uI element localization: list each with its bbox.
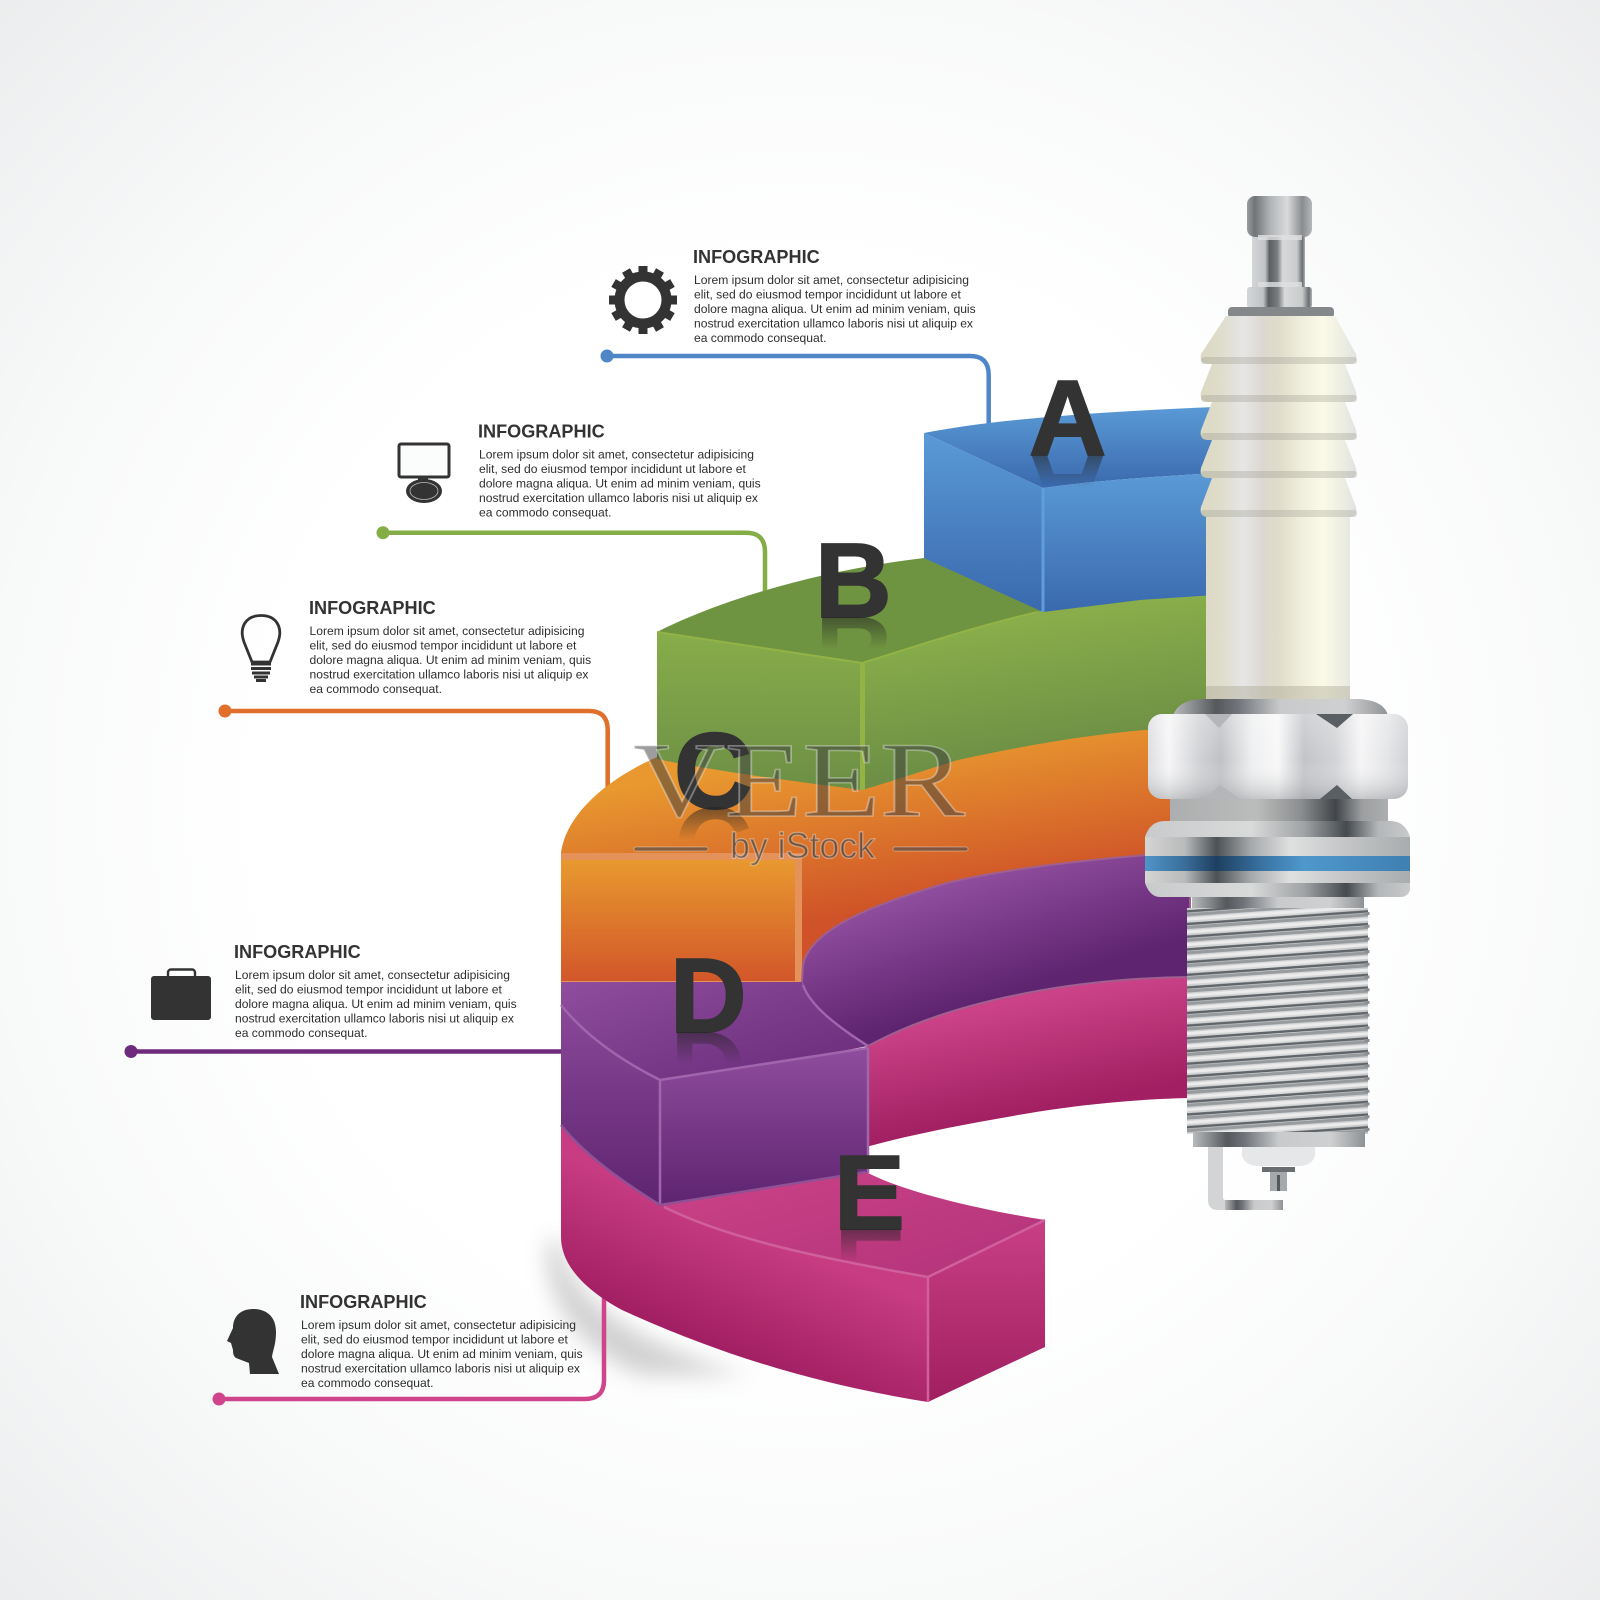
ribbon segment B: green: [657, 522, 1215, 790]
orange front face: [561, 710, 802, 983]
text block B: Lorem ipsum dolor sit amet, consectetur adipisicing: [479, 448, 754, 462]
text block B: ea commodo consequat.: [479, 506, 611, 520]
spark plug: [1145, 196, 1410, 1210]
panel B: monitor info: [376, 422, 765, 596]
connector D: [124, 1045, 563, 1058]
text block B: elit, sed do eiusmod tempor incididunt ut labore et: [479, 462, 747, 476]
connector E: [212, 1285, 604, 1406]
plug insulator ribs: [1201, 316, 1356, 517]
text block D: nostrud exercitation ullamco laboris nisi ut aliquip ex: [235, 1012, 514, 1026]
text block A: dolore magna aliqua. Ut enim ad minim veniam, quis: [694, 302, 976, 316]
ribbon segment E wall: pink: [866, 960, 1190, 1147]
text block E: Lorem ipsum dolor sit amet, consectetur adipisicing: [301, 1318, 576, 1332]
panel D: briefcase info: [124, 942, 563, 1058]
heading D: INFOGRAPHIC: [234, 942, 361, 962]
text block A: Lorem ipsum dolor sit amet, consectetur adipisicing: [694, 273, 969, 287]
text block D: ea commodo consequat.: [235, 1026, 367, 1040]
plug insulator body: [1206, 517, 1350, 700]
ribbon segment D: purple block: [561, 937, 868, 1205]
text block E: dolore magna aliqua. Ut enim ad minim veniam, quis: [301, 1347, 583, 1361]
text block D: dolore magna aliqua. Ut enim ad minim veniam, quis: [235, 997, 517, 1011]
text block B: dolore magna aliqua. Ut enim ad minim veniam, quis: [479, 476, 761, 490]
letter B: [815, 522, 892, 712]
text block E: nostrud exercitation ullamco laboris nisi ut aliquip ex: [301, 1362, 580, 1376]
plug groove: [1170, 799, 1388, 823]
rib shading: [1201, 357, 1357, 517]
ribbon segment D wall: purple: [802, 852, 1190, 1046]
text block A: elit, sed do eiusmod tempor incididunt ut labore et: [694, 288, 962, 302]
text block E: ea commodo consequat.: [301, 1376, 433, 1390]
text block A: ea commodo consequat.: [694, 331, 826, 345]
icon: gear: [609, 266, 677, 334]
connector C: [218, 704, 608, 790]
panel E: head info: [212, 1285, 604, 1406]
letter D: D: [670, 937, 747, 1055]
text block C: elit, sed do eiusmod tempor incididunt ut labore et: [310, 638, 577, 652]
letter D: [670, 937, 747, 1127]
plug flange: [1145, 821, 1410, 897]
icon: monitor: [399, 444, 449, 503]
plug ground electrode: [1208, 1147, 1283, 1210]
ribbon segment C: orange: [561, 720, 1200, 985]
text block A: nostrud exercitation ullamco laboris nisi ut aliquip ex: [694, 316, 973, 330]
letter B: B: [815, 522, 892, 640]
text block C: Lorem ipsum dolor sit amet, consectetur adipisicing: [310, 624, 584, 638]
icon: light bulb: [242, 616, 280, 680]
text block C: ea commodo consequat.: [310, 682, 442, 696]
text block D: elit, sed do eiusmod tempor incididunt ut labore et: [235, 982, 503, 996]
connector A: [600, 350, 989, 426]
heading E: INFOGRAPHIC: [300, 1292, 427, 1312]
ribbon segment A: blue: [924, 358, 1215, 612]
text block B: nostrud exercitation ullamco laboris nisi ut aliquip ex: [479, 491, 758, 505]
panel A: gear info: [600, 247, 989, 426]
icon: briefcase: [151, 970, 211, 1020]
letter A: [1029, 358, 1106, 552]
plug hex nut: [1148, 714, 1408, 799]
ribbon segment E: pink block: [561, 1125, 1045, 1402]
letter A: A: [1029, 358, 1106, 478]
letter B: B: [815, 594, 892, 712]
heading B: INFOGRAPHIC: [478, 422, 605, 442]
plug terminal: [1228, 196, 1334, 318]
plug thread: [1187, 897, 1368, 1147]
watermark: VEER: [633, 722, 966, 840]
plug tip: [1242, 1147, 1315, 1191]
connector B: [376, 526, 765, 596]
letter E: E: [834, 1206, 905, 1324]
heading C: INFOGRAPHIC: [309, 598, 436, 618]
text block C: dolore magna aliqua. Ut enim ad minim veniam, quis: [310, 653, 591, 667]
letter E: E: [834, 1134, 905, 1252]
text block D: Lorem ipsum dolor sit amet, consectetur adipisicing: [235, 968, 510, 982]
text block E: elit, sed do eiusmod tempor incididunt ut labore et: [301, 1332, 569, 1346]
letter C: C: [674, 785, 752, 906]
letter C: C: [674, 710, 752, 831]
letter D: D: [670, 1009, 747, 1127]
icon: head: [227, 1309, 279, 1374]
watermark: by iStock: [730, 825, 876, 866]
panel C: bulb info: [218, 598, 608, 790]
watermark: [633, 722, 968, 866]
plug shoulder: [1173, 699, 1388, 716]
text block C: nostrud exercitation ullamco laboris nisi ut aliquip ex: [310, 668, 588, 682]
ribbon drop shadow: [547, 1240, 750, 1375]
heading A: INFOGRAPHIC: [693, 247, 820, 267]
letter C: [674, 710, 752, 906]
letter E: [834, 1134, 905, 1324]
letter A: A: [1029, 432, 1106, 552]
